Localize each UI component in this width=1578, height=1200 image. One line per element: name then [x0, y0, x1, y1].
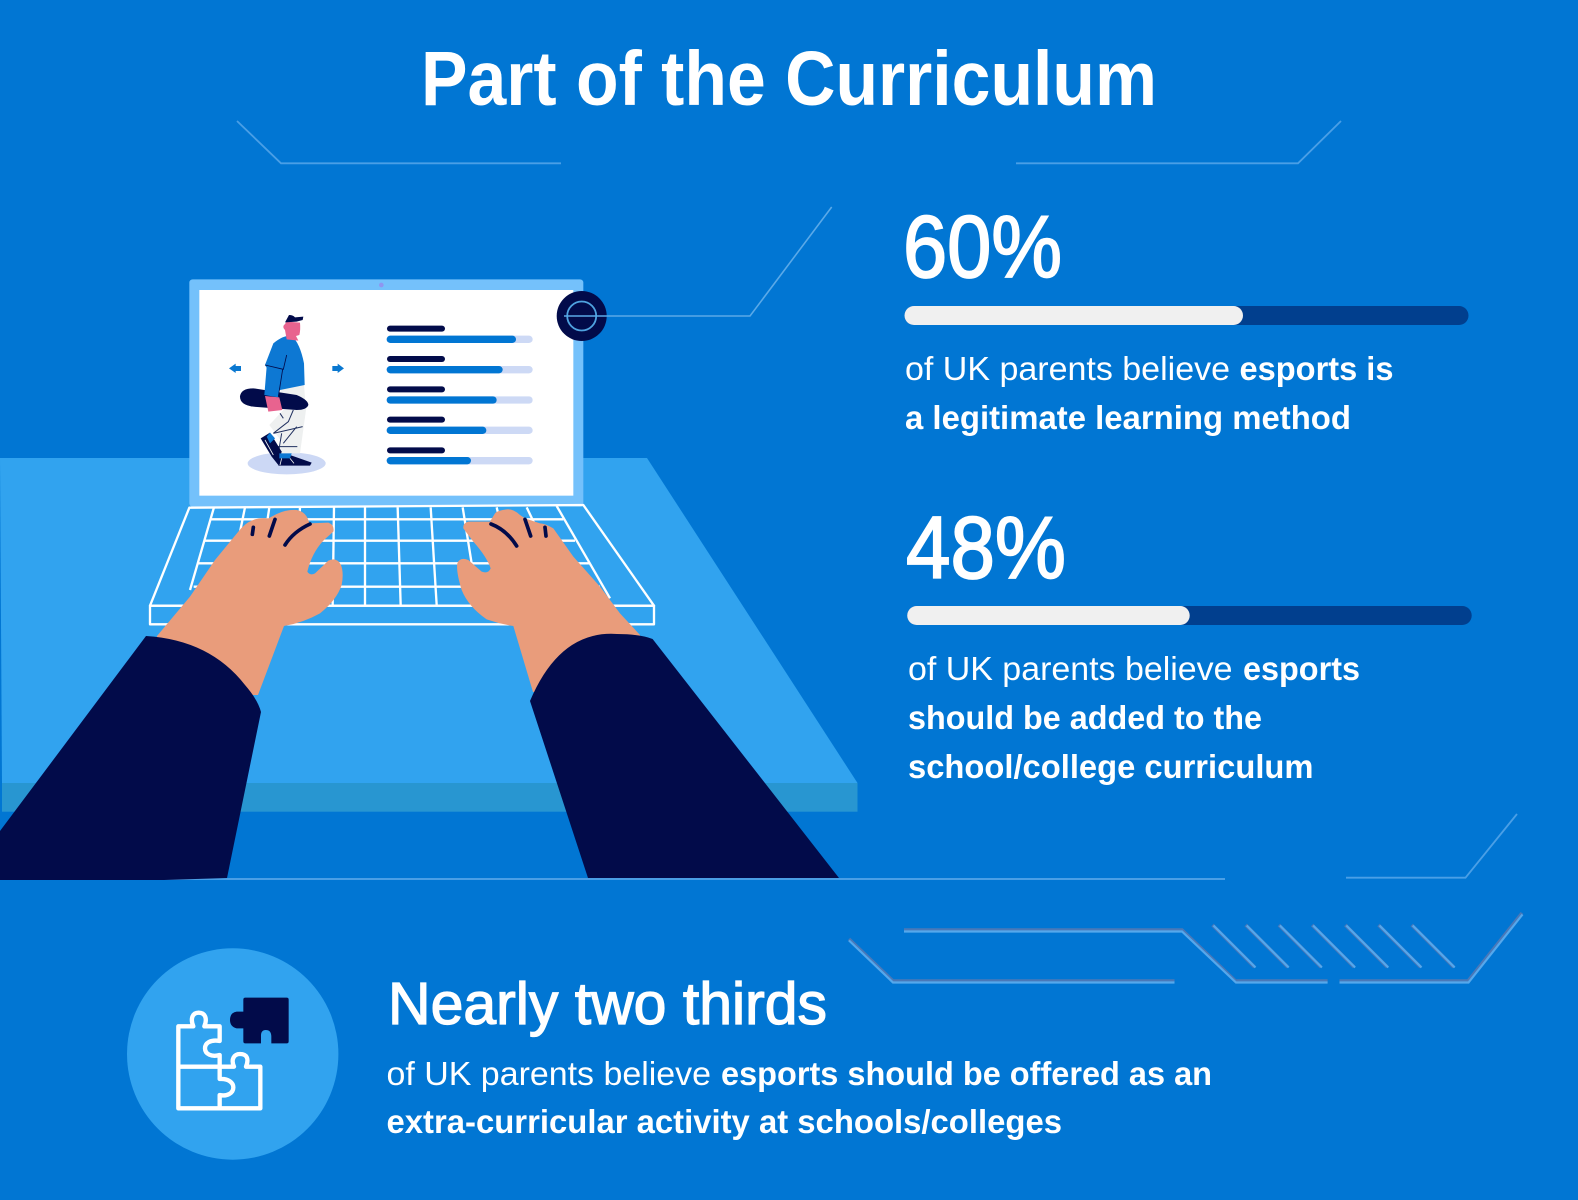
person on screen: [240, 315, 326, 474]
description 48%: of UK parents believe: [908, 650, 1232, 687]
stat: 60%: [903, 197, 1468, 436]
arrow right: [332, 364, 344, 373]
jumper: [265, 336, 305, 390]
callout marker: [557, 207, 832, 341]
desk: [0, 458, 858, 812]
description: of UK parents believe: [386, 1055, 711, 1092]
skateboard: [240, 388, 308, 410]
description 60%: [905, 350, 1394, 436]
progress bar 60%: [904, 306, 1468, 325]
hand on board: [265, 396, 282, 412]
description: extra-curricular activity at schools/colleges: [386, 1103, 1062, 1140]
description 60%: a legitimate learning method: [905, 399, 1351, 436]
arrow left: [229, 364, 241, 373]
description 48%: esports: [1243, 650, 1360, 687]
laptop lid: [189, 279, 583, 507]
illustration: laptop: [150, 279, 654, 695]
figure 60%: 60%: [903, 197, 1062, 296]
figure 48%: 48%: [906, 498, 1066, 597]
right sleeve: [530, 634, 839, 878]
description: esports should be offered as an: [721, 1055, 1212, 1092]
callout: nearly two thirds: [386, 971, 1212, 1140]
description 48%: should be added to the: [908, 699, 1262, 736]
progress bar 48%: [907, 606, 1472, 625]
title: Part of the Curriculum: [421, 36, 1157, 122]
description 48%: school/college curriculum: [908, 748, 1314, 785]
description 60%: esports is: [1240, 350, 1394, 387]
white puzzle outline: [178, 1013, 260, 1108]
heading: Nearly two thirds: [388, 971, 827, 1037]
trousers: [269, 385, 306, 453]
description: [386, 1055, 1212, 1140]
description 48%: [908, 650, 1360, 785]
icon: puzzle in circle: [127, 948, 338, 1160]
webcam: [379, 283, 384, 287]
left hand: [157, 510, 343, 695]
screen bar list: [387, 326, 533, 464]
navy puzzle piece: [230, 998, 289, 1043]
keyboard: [150, 505, 654, 624]
right hand: [457, 509, 640, 692]
shoes: [261, 433, 282, 465]
description 60%: of UK parents believe: [905, 350, 1230, 387]
stat: 48%: [906, 498, 1472, 785]
laptop screen: [199, 290, 573, 496]
left sleeve: [0, 636, 261, 880]
cap: [285, 315, 303, 322]
head: [283, 322, 300, 341]
